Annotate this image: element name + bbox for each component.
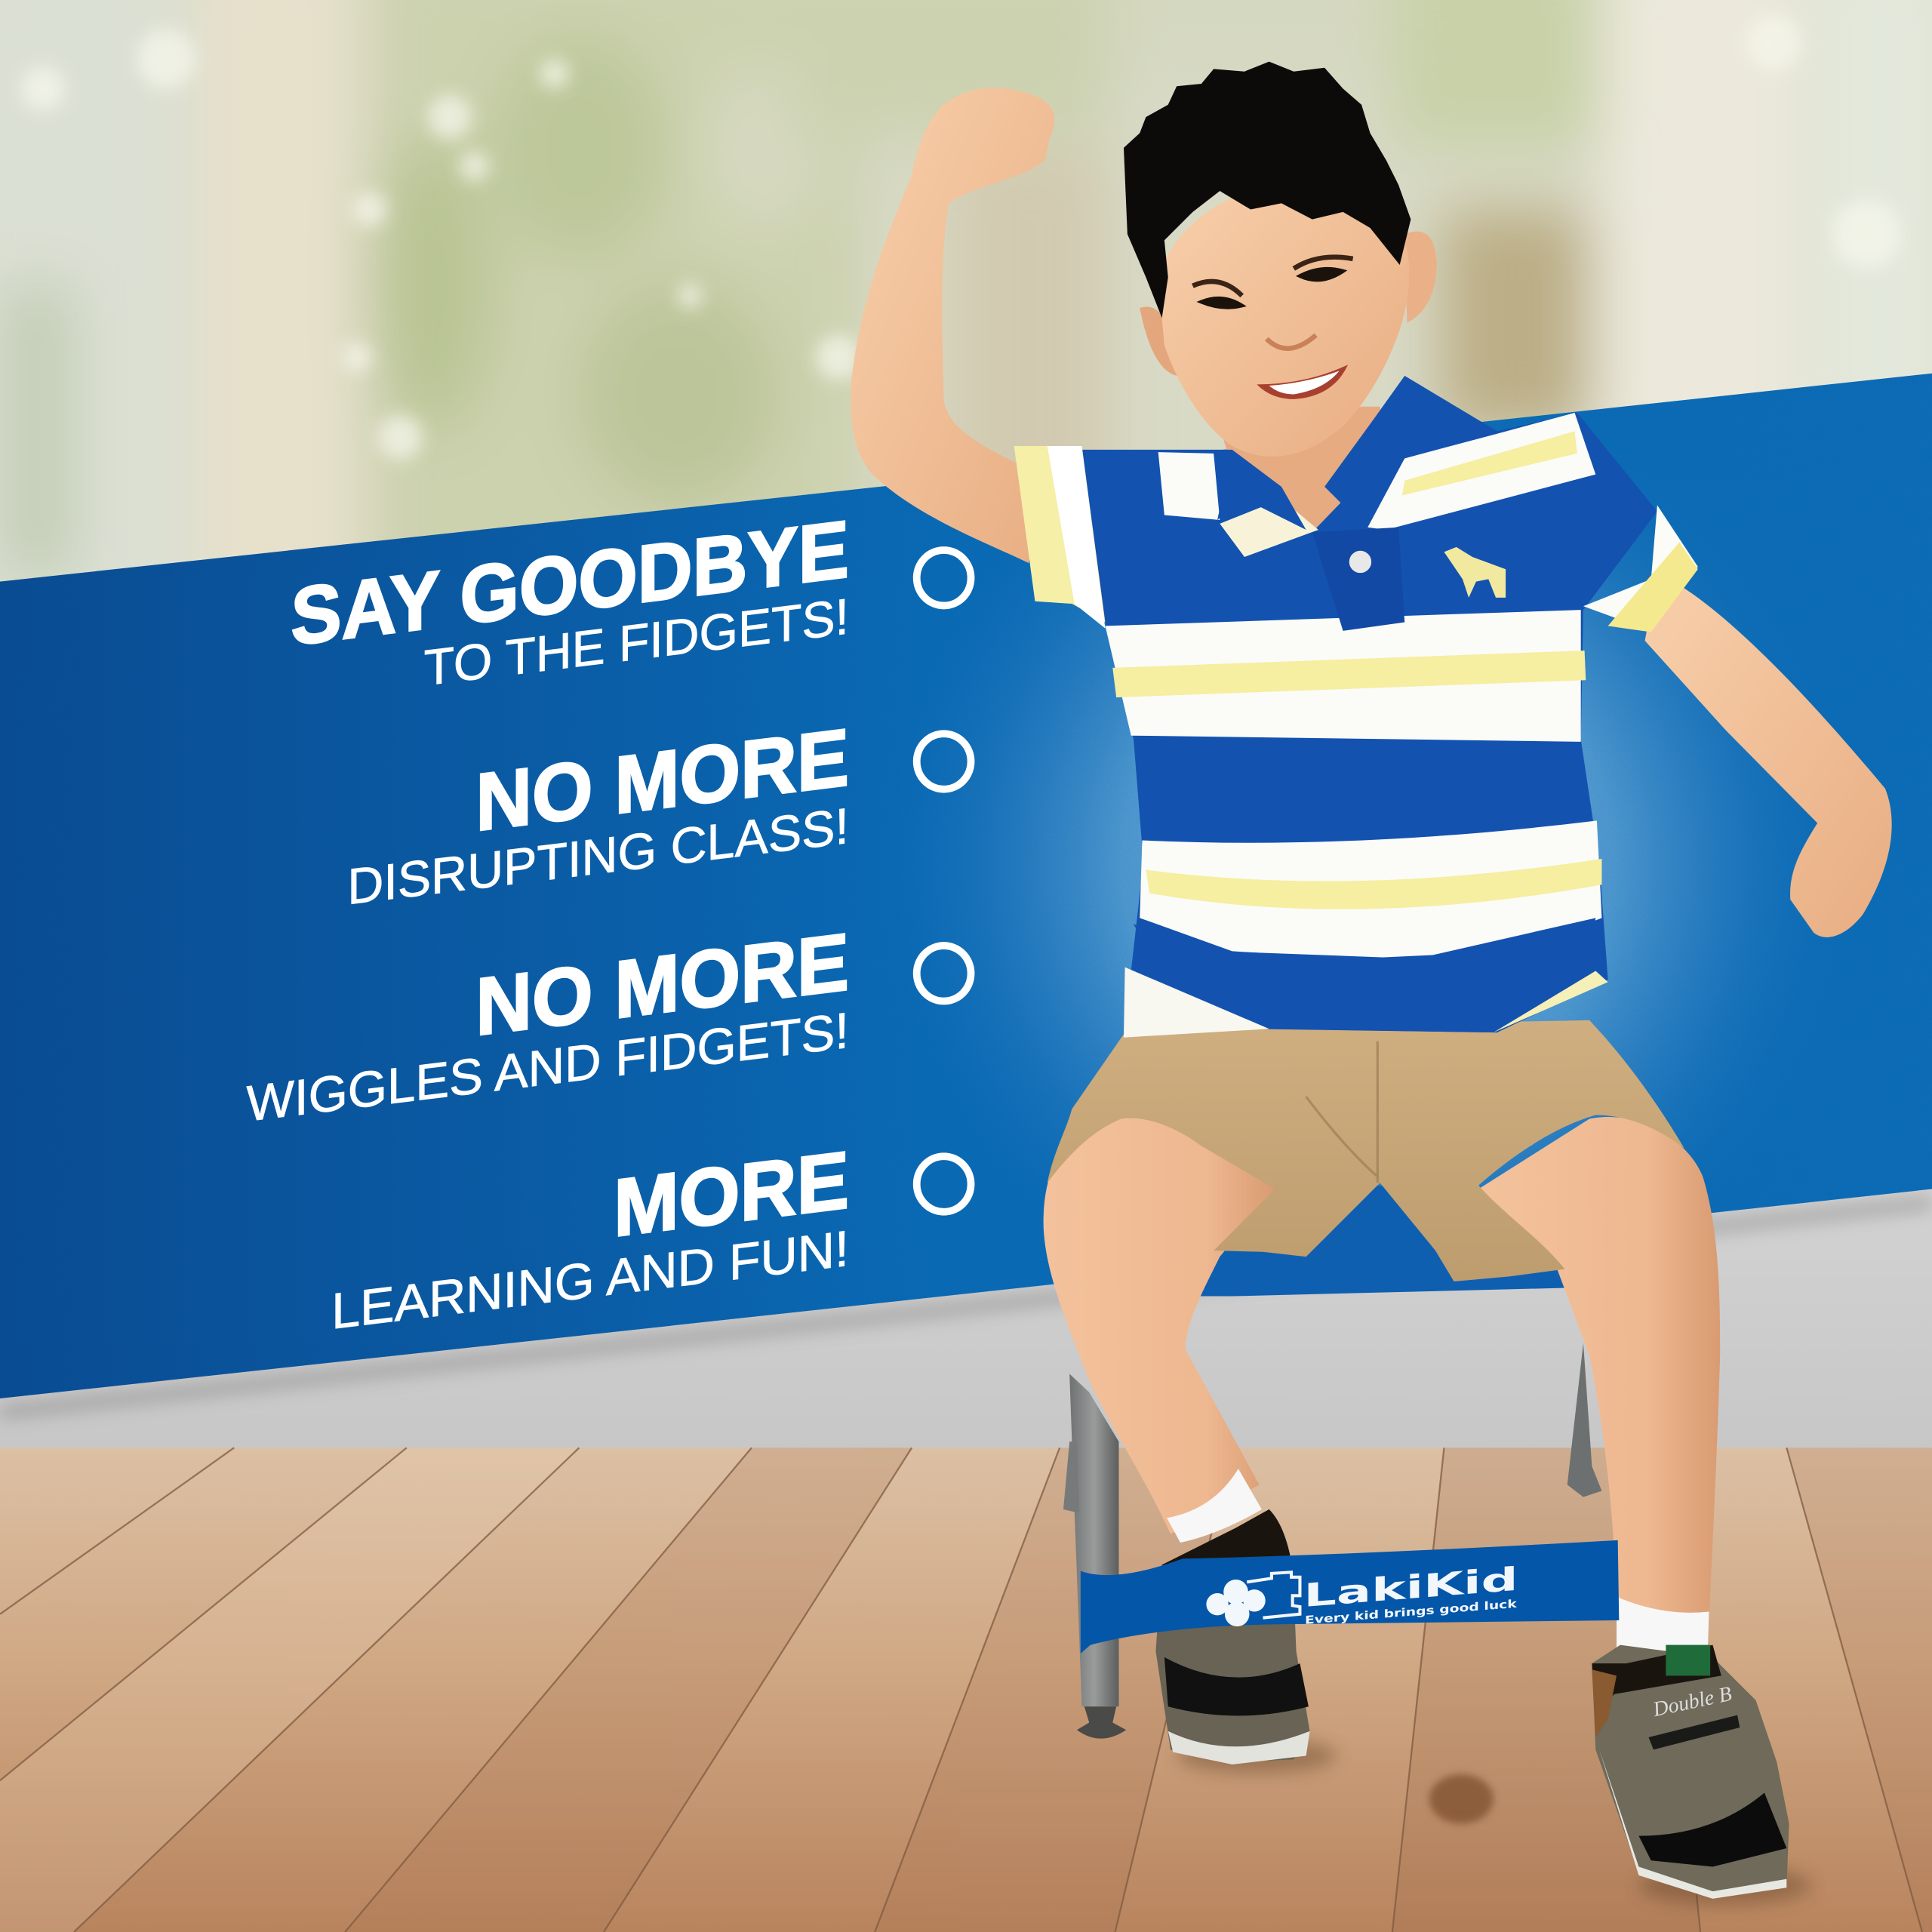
logo tagline: Every kid brings good luck <box>1305 1598 1518 1627</box>
shorts <box>1048 1020 1684 1281</box>
text block: say goodbye to the fidgets: TO THE FIDGETS! <box>424 588 849 697</box>
legs <box>1044 1116 1720 1620</box>
text block: no more wiggles and fidgets <box>247 915 849 1133</box>
wooden floor <box>0 1447 1932 1932</box>
blurred background: garden and pillars <box>0 0 1932 690</box>
text block: more learning and fun: LEARNING AND FUN! <box>331 1220 849 1340</box>
text block: no more disrupting class: DISRUPTING CLASS! <box>347 798 849 915</box>
head <box>1124 62 1437 457</box>
grey wall <box>0 1109 1932 1449</box>
text block: say goodbye to the fidgets: SAY GOODBYE <box>291 503 849 663</box>
right arm <box>1645 573 1892 937</box>
neck <box>1214 407 1386 540</box>
icon: bullet circle 1 <box>917 550 971 605</box>
text block: more learning and fun: MORE <box>614 1134 849 1254</box>
icon: bullet circle 3 <box>917 946 971 1001</box>
text block: more learning and fun <box>331 1134 849 1340</box>
text block: no more disrupting class <box>347 711 849 915</box>
text block: no more wiggles and fidgets: NO MORE <box>475 915 849 1053</box>
text block: no more wiggles and fidgets: WIGGLES AND FIDGETS! <box>247 1002 849 1133</box>
logo: clover and puzzle piece <box>1206 1572 1300 1626</box>
band shadow on wall <box>0 1195 1932 1420</box>
chair <box>1063 1186 1601 1739</box>
shoes: Double B <box>1651 1682 1734 1721</box>
photo: boy seated on chair <box>851 62 1892 1905</box>
shoe shadows <box>1177 1739 1811 1905</box>
icon: bullet circle 4 <box>917 1156 971 1212</box>
icon: bullet circle 2 <box>917 734 971 789</box>
shirt <box>1014 376 1698 1038</box>
panel: slanted blue banner <box>0 370 1932 1404</box>
icon: moose emblem <box>1444 547 1506 598</box>
text block: no more disrupting class: NO MORE <box>475 711 849 848</box>
shoes <box>1155 1509 1789 1899</box>
raised arm with fist <box>851 88 1054 563</box>
product: LakiKid resistance band <box>1081 1540 1619 1654</box>
logo wordmark: LakiKid <box>1303 1561 1518 1615</box>
socks <box>1167 1469 1262 1543</box>
